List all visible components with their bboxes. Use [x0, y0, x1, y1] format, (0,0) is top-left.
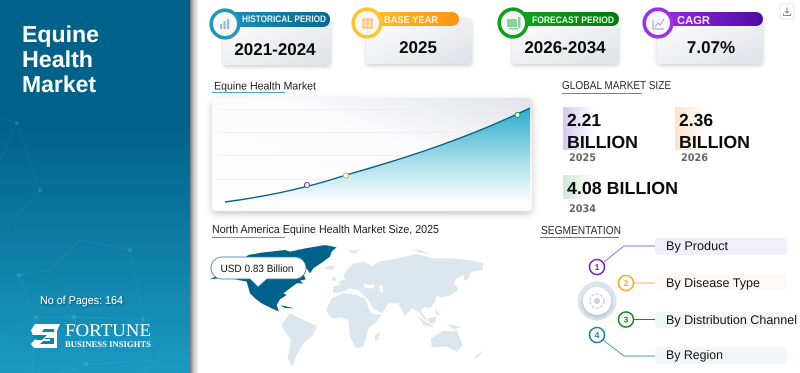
- segment: by distribution channel: [618, 312, 797, 328]
- segment: by disease type: By Disease Type: [666, 276, 760, 290]
- segment: by distribution channel: 3: [624, 314, 629, 324]
- line chart: [212, 98, 532, 211]
- land: americas: [210, 245, 337, 367]
- panel: base year: BASE YEAR: [384, 15, 439, 26]
- icon: download: [780, 4, 794, 19]
- marker: 2025: [304, 182, 310, 188]
- icon: growth chart: [653, 19, 664, 29]
- panel: CAGR: CAGR: [677, 15, 711, 27]
- marker: 2034: [515, 112, 520, 118]
- segment: by product: 1: [595, 262, 600, 272]
- segment: by distribution channel: By Distribution Channel: [666, 313, 797, 327]
- stat: 2034 size: [563, 175, 678, 215]
- land: eastern hemisphere: [326, 249, 483, 358]
- stat: 2025 size: 2025: [569, 152, 596, 164]
- icon: calendar: [362, 18, 373, 29]
- panel: historical period: HISTORICAL PERIOD: [242, 14, 326, 25]
- segment: by product: [590, 238, 787, 274]
- panel: forecast period: 2026-2034: [524, 38, 606, 57]
- stat: 2026 size: 2.36: [679, 110, 713, 130]
- title: Equine: [22, 21, 99, 47]
- callout: USD 0.83 Billion: [211, 257, 306, 287]
- stat: 2026 size: 2026: [681, 152, 708, 164]
- panel: forecast period: [499, 9, 619, 64]
- text: number of pages: No of Pages: 164: [40, 295, 124, 307]
- land: caribbean: [280, 305, 294, 308]
- panel: historical period: [211, 10, 331, 65]
- logo: Fortune Business Insights: BUSINESS INSIGHTS: [65, 339, 151, 349]
- land: north america: [210, 245, 337, 312]
- segment: by region: By Region: [666, 348, 723, 362]
- panel: sidebar: [0, 0, 199, 373]
- trend line: [225, 108, 530, 202]
- panel: CAGR: 7.07%: [687, 38, 735, 57]
- logo: Fortune Business Insights: [31, 320, 151, 349]
- title: Market: [22, 71, 96, 97]
- panel: base year: 2025: [399, 38, 437, 57]
- heading: north america: North America Equine Health Market Size, 2025: [212, 224, 439, 236]
- stat: 2025 size: BILLION: [567, 132, 638, 152]
- segment: by region: [590, 328, 787, 364]
- heading: equine health market: Equine Health Market: [214, 80, 316, 92]
- marker: 2026: [344, 173, 348, 178]
- stat: 2025 size: [563, 107, 638, 164]
- heading: global market size: GLOBAL MARKET SIZE: [562, 80, 671, 92]
- stat: 2034 size: 2034: [569, 203, 596, 215]
- panel: base year: [353, 9, 472, 64]
- stat: 2026 size: [675, 107, 750, 164]
- panel: historical period: 2021-2024: [234, 40, 316, 59]
- segment: by product: By Product: [666, 239, 729, 253]
- world map: [210, 245, 483, 367]
- stat: 2034 size: 4.08 BILLION: [567, 178, 678, 198]
- segment: by disease type: [618, 274, 787, 290]
- title: [22, 21, 99, 97]
- icon: forecast screen: [507, 17, 520, 30]
- heading: segmentation: SEGMENTATION: [541, 225, 621, 237]
- logo: Fortune Business Insights: FORTUNE: [65, 320, 151, 340]
- stat: 2026 size: BILLION: [679, 132, 750, 152]
- panel: forecast period: FORECAST PERIOD: [532, 15, 614, 26]
- segment: by region: 4: [595, 330, 600, 340]
- segment: by disease type: 2: [624, 278, 629, 288]
- stat: 2025 size: 2.21: [567, 110, 601, 130]
- panel: CAGR: [644, 9, 763, 64]
- title: Health: [22, 46, 93, 72]
- segmentation hub: [578, 282, 616, 320]
- callout: USD 0.83 Billion: USD 0.83 Billion: [220, 263, 294, 275]
- chart area: [225, 108, 530, 202]
- icon: bar chart: [220, 19, 229, 29]
